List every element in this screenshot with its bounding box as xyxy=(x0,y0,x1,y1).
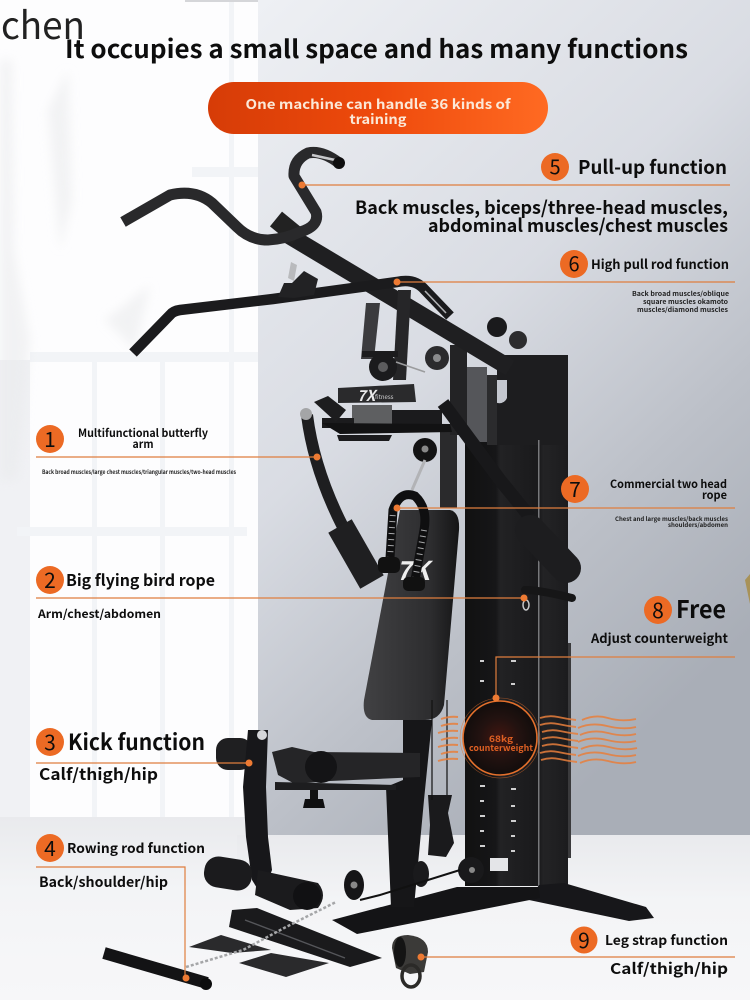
callout 3: kick: 3 xyxy=(44,727,56,757)
callout 9: leg strap: Leg strap function xyxy=(605,929,728,949)
machine: seat and leg pads xyxy=(202,730,420,910)
callout 3: kick: Calf/thigh/hip xyxy=(39,761,158,785)
callout 3: kick xyxy=(36,725,205,785)
callout 6: high pull rod: Back broad muscles/oblique xyxy=(632,288,729,298)
callout 4: rowing rod xyxy=(36,833,205,892)
counterweight indicator xyxy=(460,698,540,778)
machine: triceps rope xyxy=(378,495,425,591)
callout 1: butterfly arm: arm xyxy=(132,436,154,452)
callout 9: leg strap xyxy=(570,925,728,979)
banner pill xyxy=(208,82,548,134)
leader lines xyxy=(36,182,735,982)
callout 5: pull-up: Pull-up function xyxy=(578,153,727,180)
callout 5: pull-up xyxy=(355,151,728,238)
counterweight label: 68kg xyxy=(489,732,514,745)
callout 6: high pull rod xyxy=(560,248,729,314)
machine: leg strap xyxy=(392,935,428,987)
callout 7: two head rope: Commercial two head xyxy=(610,476,727,492)
callout 2: flying bird rope: 2 xyxy=(44,565,56,595)
banner pill: One machine can handle 36 kinds of xyxy=(246,93,512,113)
title: It occupies a small space and has many functions xyxy=(65,30,688,66)
logo on carriage: fitness xyxy=(375,392,394,401)
callout 8: free counterweight: 8 xyxy=(652,595,664,625)
machine: upper pulleys and carriage xyxy=(278,262,527,490)
callout 3: kick: Kick function xyxy=(68,725,205,757)
callout 1: butterfly arm: 1 xyxy=(44,424,56,454)
callout 2: flying bird rope xyxy=(36,565,215,622)
callout 2: flying bird rope: Big flying bird rope xyxy=(66,567,215,591)
callout 5: pull-up: abdominal muscles/chest muscles xyxy=(428,212,728,238)
callout 6: high pull rod: 6 xyxy=(568,248,580,277)
machine: butterfly arms xyxy=(300,403,572,610)
callout 1: butterfly arm: Back broad muscles/large chest muscles/triangular muscles/two-head muscles xyxy=(42,468,236,476)
callout 8: free counterweight: Free xyxy=(676,590,726,625)
heat waves xyxy=(438,716,637,763)
logo on carriage: 7X xyxy=(357,385,378,406)
machine: pull-up arm xyxy=(123,152,510,368)
callout 8: free counterweight: Adjust counterweight xyxy=(590,628,729,647)
callout 7: two head rope: 7 xyxy=(569,474,581,504)
callout 6: high pull rod: High pull rod function xyxy=(591,254,729,273)
callout 4: rowing rod: Rowing rod function xyxy=(67,837,205,857)
machine: backrest pad xyxy=(364,510,459,720)
callout 8: free counterweight xyxy=(590,590,729,647)
counterweight label xyxy=(469,732,533,754)
machine: rowing rod xyxy=(104,953,212,990)
callout 9: leg strap: 9 xyxy=(578,925,590,955)
machine: low pulleys and weight block xyxy=(344,700,508,900)
callout 1: butterfly arm: Multifunctional butterfly xyxy=(78,425,209,441)
counterweight label: counterweight xyxy=(469,741,533,754)
logo on carriage xyxy=(357,385,394,406)
callout 5: pull-up: Back muscles, biceps/three-head muscles, xyxy=(355,194,728,220)
callout 7: two head rope: shoulders/abdomen xyxy=(668,520,728,529)
logo on backrest: 7K xyxy=(396,551,433,588)
gym machine photo xyxy=(104,152,654,990)
callout 6: high pull rod: muscles/diamond muscles xyxy=(637,304,728,314)
callout 4: rowing rod: 4 xyxy=(44,833,56,863)
machine: tower and frame xyxy=(332,345,654,934)
callout 7: two head rope: Chest and large muscles/back muscles xyxy=(615,514,728,523)
callout 9: leg strap: Calf/thigh/hip xyxy=(610,958,728,979)
callout 7: two head rope xyxy=(561,474,728,529)
callout 7: two head rope: rope xyxy=(702,487,727,503)
banner pill: training xyxy=(350,108,406,128)
callout 4: rowing rod: Back/shoulder/hip xyxy=(39,872,168,892)
machine: foot plate xyxy=(186,902,382,977)
callout 6: high pull rod: square muscles okamoto xyxy=(643,296,728,306)
callout 1: butterfly arm xyxy=(36,424,236,476)
callout 5: pull-up: 5 xyxy=(549,151,561,180)
callout 2: flying bird rope: Arm/chest/abdomen xyxy=(37,606,161,622)
